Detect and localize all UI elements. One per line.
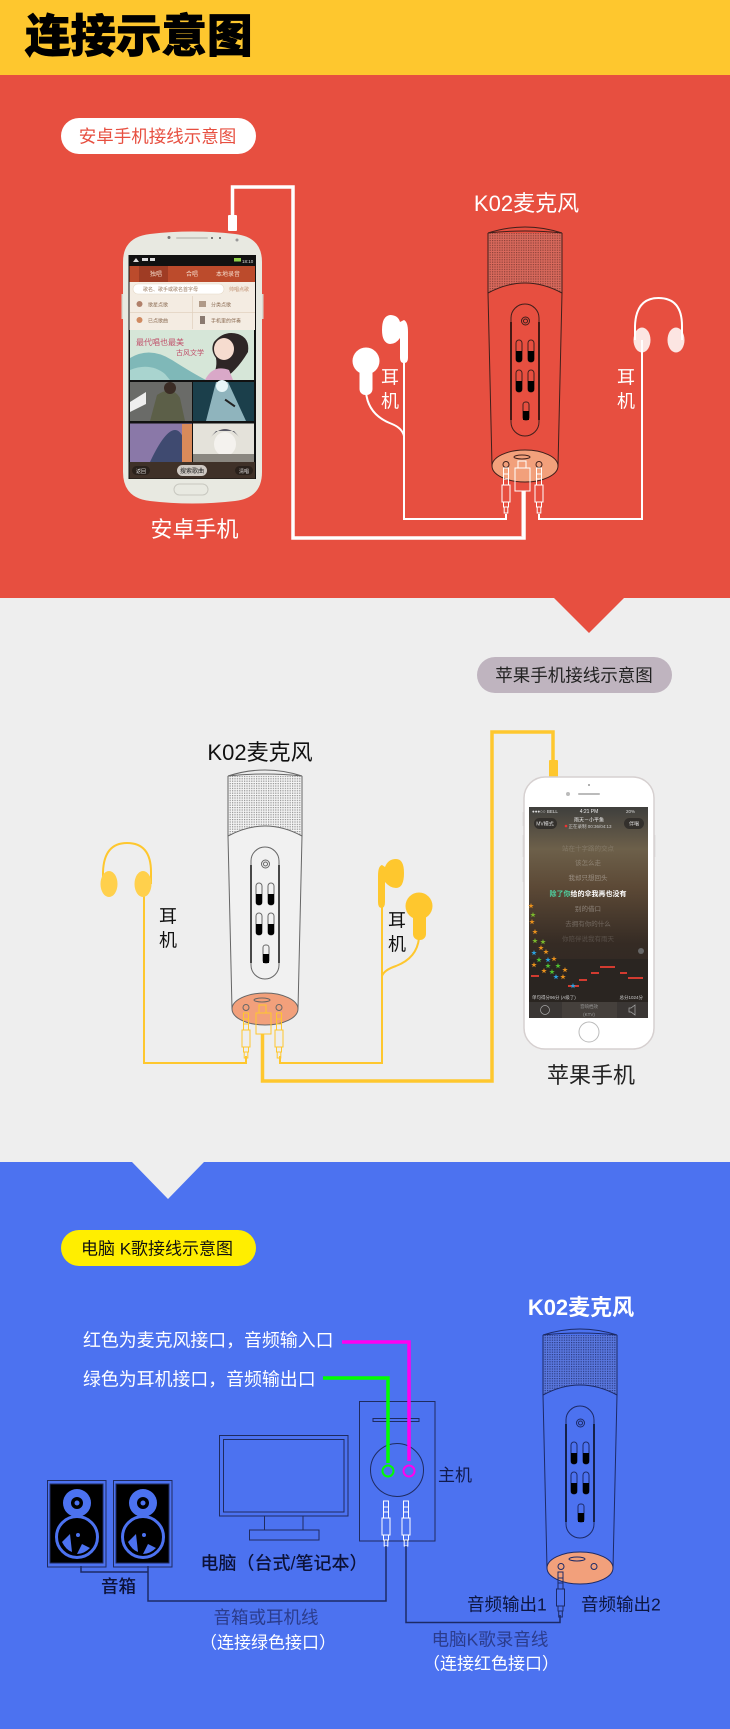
green line bbox=[323, 1378, 388, 1463]
iphone screen: ★ bbox=[545, 963, 551, 970]
pill heading: computer bbox=[61, 1230, 256, 1266]
cable: phone to microphone bbox=[232, 187, 524, 538]
iphone screen: 该怎么走 bbox=[575, 858, 602, 867]
label: earphones right bbox=[617, 368, 635, 412]
iphone screen: 我却只想回头 bbox=[568, 873, 608, 882]
label: speakers: 音箱 bbox=[101, 1576, 136, 1596]
headphone cups bbox=[100, 871, 152, 897]
iphone screen: 去拥有你的什么 bbox=[565, 919, 611, 928]
label: k song cable: 电脑K歌录音线 bbox=[432, 1630, 548, 1650]
android screen: 已点歌曲 bbox=[148, 318, 168, 324]
iphone screen: 20% bbox=[626, 809, 635, 814]
android screen: 分类点歌 bbox=[211, 302, 231, 308]
speaker left bbox=[48, 1480, 106, 1567]
iphone screen: 你陪伴说我有雨天 bbox=[562, 934, 614, 943]
iphone screen: ★ bbox=[555, 963, 561, 970]
magenta port bbox=[404, 1466, 414, 1476]
iphone screen: ★ bbox=[528, 903, 534, 910]
iphone screen: 音响档效 bbox=[580, 1003, 598, 1010]
iphone screen bbox=[528, 807, 648, 1018]
iphone screen: ★ bbox=[541, 968, 547, 975]
green port bbox=[382, 1466, 394, 1476]
microphone bbox=[228, 770, 302, 1025]
iphone screen: 4:21 PM bbox=[580, 809, 598, 815]
pill heading: android bbox=[61, 118, 256, 154]
home button bbox=[174, 484, 208, 495]
iphone screen: 总分1024分 bbox=[619, 994, 643, 1001]
connector plug: android bbox=[228, 215, 237, 231]
android screen: 最代唱也最美 bbox=[136, 337, 184, 347]
earbuds bbox=[352, 315, 408, 395]
android screen: 18:10 bbox=[242, 259, 254, 264]
android screen: 手机里的伴奏 bbox=[211, 318, 241, 324]
label: earphones right bbox=[388, 910, 406, 954]
monitor bbox=[220, 1436, 348, 1540]
panel: android connection bbox=[0, 75, 730, 598]
label: connect green: （连接绿色接口） bbox=[200, 1634, 336, 1652]
microphone K02 label: K02麦克风 bbox=[528, 1295, 634, 1320]
iphone screen: ★ bbox=[551, 956, 557, 963]
usb connector: android bbox=[515, 461, 530, 536]
android screen: 本地录音 bbox=[216, 270, 240, 278]
speaker right bbox=[114, 1480, 172, 1567]
microphone K02 label: K02麦克风 bbox=[207, 740, 313, 765]
wires: earbuds and headphones bbox=[366, 298, 682, 519]
android screen: 合唱 bbox=[186, 270, 198, 278]
label: host: 主机 bbox=[438, 1466, 472, 1485]
iphone bbox=[522, 777, 656, 1049]
android screen: 古风文学 bbox=[176, 348, 204, 357]
android screen: 帅唱点歌 bbox=[229, 286, 249, 293]
label: audio output 1: 音频输出1 bbox=[467, 1594, 547, 1614]
earbuds bbox=[378, 859, 432, 940]
label: earphones left: 机 bbox=[159, 930, 177, 950]
iphone screen: ★ bbox=[529, 919, 535, 926]
jack: microphone output bbox=[556, 1572, 564, 1617]
legend: green port: 绿色为耳机接口，音频输出口 bbox=[83, 1370, 316, 1390]
iphone screen: 正在录制 00:36/04:13 bbox=[568, 823, 612, 830]
iphone screen: ★ bbox=[538, 945, 544, 952]
magenta line bbox=[342, 1342, 409, 1461]
iphone screen: ★ bbox=[530, 912, 536, 919]
wires: headphones and earbuds bbox=[103, 843, 419, 1063]
iphone screen: (KTV) bbox=[583, 1012, 595, 1017]
panel: iphone connection bbox=[0, 598, 730, 1162]
microphone K02 label: K02麦克风 bbox=[474, 191, 579, 216]
cable: iphone to microphone bbox=[262, 732, 553, 1081]
pill heading: android: 安卓手机接线示意图 bbox=[79, 126, 236, 146]
iphone screen: ★ bbox=[560, 974, 566, 981]
iphone screen: MV模式 bbox=[536, 820, 554, 828]
pill heading: iphone bbox=[477, 657, 672, 693]
header bar bbox=[0, 0, 730, 75]
iphone screen: 雨天－小平鱼 bbox=[574, 816, 604, 824]
title: 连接示意图 bbox=[25, 11, 253, 62]
wire: recording cable bbox=[406, 1546, 560, 1622]
notch arrow: red bbox=[554, 598, 624, 633]
label: earphones right: 机 bbox=[388, 934, 406, 954]
label: earphones left: 耳 bbox=[381, 368, 399, 388]
label: earphones left: 机 bbox=[381, 392, 399, 412]
iphone screen: ★ bbox=[570, 983, 576, 990]
home button bbox=[579, 1022, 599, 1042]
host box bbox=[360, 1402, 435, 1541]
iphone screen: ★ bbox=[562, 967, 568, 974]
label: iphone: 苹果手机 bbox=[547, 1063, 635, 1088]
iphone screen: ★ bbox=[549, 969, 555, 976]
notch arrow: gray bbox=[132, 1162, 204, 1199]
headphones cups bbox=[634, 328, 684, 352]
microphone bbox=[543, 1329, 617, 1584]
iphone screen: 伴唱 bbox=[629, 820, 639, 828]
android phone bbox=[122, 232, 264, 504]
label: earphones right: 机 bbox=[617, 392, 635, 412]
microphone bbox=[488, 227, 562, 482]
iphone screen: ★ bbox=[543, 949, 549, 956]
android screen: 歌星点歌 bbox=[148, 302, 168, 308]
label: android phone: 安卓手机 bbox=[150, 517, 239, 542]
label: speaker cable: 音箱或耳机线 bbox=[214, 1608, 318, 1628]
iphone screen: ★ bbox=[540, 939, 546, 946]
pill heading: computer: 电脑 K歌接线示意图 bbox=[81, 1239, 233, 1258]
android screen: 清唱 bbox=[239, 468, 249, 475]
label: earphones left: 耳 bbox=[159, 906, 177, 926]
iphone screen: 站在十字路的交点 bbox=[562, 844, 614, 852]
iphone screen: 除了你给的伞我再也没有 bbox=[550, 889, 626, 898]
iphone screen: 单句得分96分 (A级了) bbox=[532, 994, 576, 1001]
legend: red port: 红色为麦克风接口，音频输入口 bbox=[83, 1330, 333, 1350]
label: earphones right: 耳 bbox=[388, 910, 406, 930]
iphone screen: ●●●○○ BELL bbox=[532, 809, 558, 814]
android screen bbox=[128, 255, 256, 479]
iphone screen: ★ bbox=[532, 938, 538, 945]
label: earphones left bbox=[159, 906, 177, 950]
panel: computer connection bbox=[0, 1162, 730, 1729]
label: earphones right: 耳 bbox=[617, 368, 635, 388]
android screen: 歌名、歌手或歌名首字母 bbox=[143, 286, 198, 293]
label: connect red: （连接红色接口） bbox=[423, 1654, 559, 1674]
iphone screen: ★ bbox=[536, 957, 542, 964]
label: computer: 电脑（台式/笔记本） bbox=[200, 1554, 368, 1574]
label: audio output 2: 音频输出2 bbox=[581, 1594, 661, 1614]
connector plug: iphone bbox=[549, 760, 558, 778]
iphone screen: ★ bbox=[531, 962, 537, 969]
pill heading: iphone: 苹果手机接线示意图 bbox=[495, 665, 653, 685]
jacks: iphone bbox=[242, 1013, 283, 1058]
android screen: 返回 bbox=[136, 468, 146, 475]
android screen: 独唱 bbox=[150, 270, 162, 278]
iphone screen: ★ bbox=[532, 929, 538, 936]
iphone screen: ★ bbox=[531, 950, 537, 957]
jacks: android bbox=[502, 468, 543, 513]
iphone screen: 别的借口 bbox=[575, 904, 601, 913]
iphone screen: ★ bbox=[545, 957, 551, 964]
android screen: 搜索歌曲 bbox=[180, 467, 204, 475]
wire: speakers bbox=[81, 1546, 386, 1601]
usb connector: iphone bbox=[256, 1005, 271, 1034]
label: earphones left bbox=[381, 368, 399, 412]
jacks: host bbox=[382, 1501, 410, 1546]
iphone screen: ★ bbox=[553, 974, 559, 981]
